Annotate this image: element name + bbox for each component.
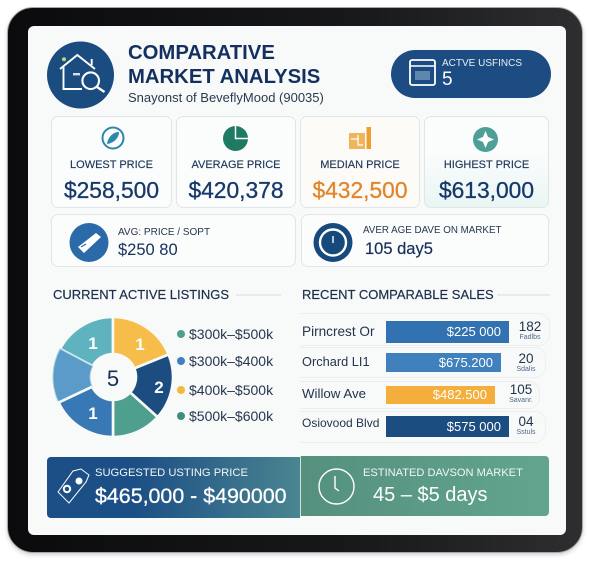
legend item: $400k–$500k	[189, 382, 273, 398]
icon: pie	[223, 126, 248, 151]
heading: recent comparable sales: RECENT COMPARABLE SALES	[302, 287, 494, 302]
donut chart: 1	[135, 335, 145, 354]
pill text	[442, 58, 522, 90]
banner: suggested listing price	[47, 457, 300, 518]
sale row: Osiovood Blvd: $575 000	[447, 419, 501, 434]
sale row: Orchard LI1	[302, 351, 536, 373]
sale row: Orchard LI1: Orchard LI1	[302, 354, 370, 369]
metric card: average days on market	[301, 214, 549, 267]
banner text: SUGGESTED USTING PRICE	[95, 467, 248, 479]
KPI card: highest price: HIGHEST PRICE	[444, 159, 529, 171]
sale row: Willow Ave: Willow Ave	[302, 386, 366, 401]
metric text	[118, 227, 210, 259]
KPI card: highest price	[424, 116, 549, 208]
KPI card: lowest price	[51, 116, 172, 208]
sale row: Pirncrest Or: Fadlbs	[519, 334, 540, 341]
sale row: Osiovood Blvd: 04	[518, 414, 534, 429]
sale row: Orchard LI1: Sdalis	[516, 366, 536, 373]
legend item: $300k–$500k	[189, 326, 273, 342]
donut chart: 2	[154, 378, 164, 397]
title	[128, 42, 320, 88]
metric text: 105 day5	[365, 240, 433, 258]
sale row: Pirncrest Or: Pirncrest Or	[302, 324, 375, 339]
sale row: Osiovood Blvd	[302, 414, 536, 437]
metric text	[363, 225, 502, 258]
donut chart: 1	[88, 404, 98, 423]
sale row: Orchard LI1: $675.200	[439, 355, 493, 370]
donut chart: 5	[107, 366, 119, 391]
icon: orange bars	[349, 127, 371, 149]
KPI card: lowest price: $258,500	[64, 177, 159, 203]
banner: estimated days on market	[300, 456, 549, 516]
metric card: average price per square foot	[51, 214, 296, 267]
sale row: Willow Ave: $482.500	[433, 387, 487, 402]
sale row: Osiovood Blvd: Osiovood Blvd	[302, 416, 379, 430]
sale row: Willow Ave: 105	[510, 382, 532, 397]
legend	[177, 326, 274, 424]
banner text	[363, 467, 523, 506]
icon: diamond badge	[473, 127, 498, 152]
icon: browser window	[409, 59, 436, 86]
KPI card: median price: MEDIAN PRICE	[320, 159, 400, 171]
KPI card: average price	[176, 116, 296, 208]
KPI card: average price: AVERAGE PRICE	[191, 159, 281, 171]
KPI card: median price: $432,500	[312, 177, 408, 203]
sale row: Osiovood Blvd: Sstuls	[516, 429, 536, 436]
sale row: Willow Ave	[302, 382, 533, 404]
pill text: 5	[442, 69, 453, 90]
legend item: $500k–$600k	[189, 408, 273, 424]
icon: clock outline	[318, 468, 355, 505]
donut chart: 1	[88, 334, 98, 353]
icon: ruler badge	[70, 223, 108, 262]
legend item: $300k–$400k	[189, 353, 273, 369]
icon: clock badge	[314, 223, 352, 262]
pill text: ACTVE USFINCS	[442, 58, 522, 69]
KPI card: average price: $420,378	[188, 177, 284, 203]
title: COMPARATIVE	[128, 42, 275, 64]
banner text: 45 – $5 days	[373, 484, 488, 506]
sale row: Pirncrest Or	[302, 319, 541, 343]
metric text: AVG: PRICE / SOPT	[118, 227, 210, 238]
subtitle: Snayonst of BeveflyMood (90035)	[128, 90, 324, 105]
sale row: Pirncrest Or: 182	[519, 319, 541, 334]
icon: leaf	[102, 126, 124, 150]
header icon: house with magnifier	[47, 42, 114, 108]
sale row: Willow Ave: Savanr.	[509, 397, 533, 404]
donut chart	[52, 318, 172, 436]
active listings pill	[391, 50, 551, 98]
banner text	[95, 467, 287, 508]
heading: current active listings: CURRENT ACTIVE LISTINGS	[53, 287, 229, 302]
banner text: $465,000 - $490000	[95, 484, 287, 508]
metric text: AVER AGE DAVE ON MARKET	[363, 225, 501, 236]
KPI card: median price	[300, 116, 420, 208]
banner text: ESTINATED DAVSON MARKET	[363, 467, 523, 479]
sale row: Pirncrest Or: $225 000	[447, 324, 501, 339]
sale row: Orchard LI1: 20	[518, 351, 534, 366]
metric text: $250 80	[118, 241, 178, 259]
KPI card: lowest price: LOWEST PRICE	[70, 159, 153, 171]
title: MARKET ANALYSIS	[128, 66, 320, 88]
icon: price tag	[57, 468, 90, 504]
KPI card: highest price: $613,000	[439, 177, 534, 203]
